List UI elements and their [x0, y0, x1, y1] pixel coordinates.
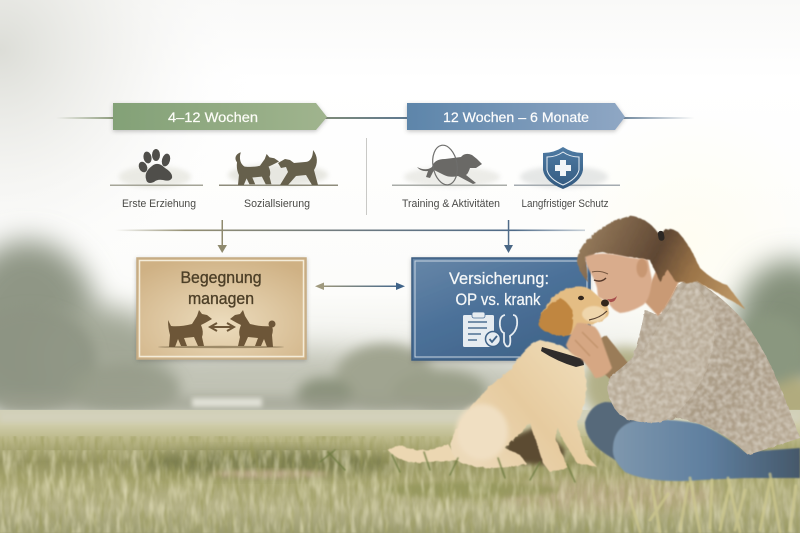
muzzle — [582, 306, 606, 322]
panel heading: Begegnung — [180, 268, 262, 287]
collar — [541, 347, 584, 367]
hair — [577, 216, 745, 309]
banner: 4–12 Wochen: 4–12 Wochen — [168, 109, 258, 125]
icon: two dogs meeting — [158, 310, 284, 348]
column: Sozialisierung — [219, 150, 338, 210]
horizontal connector — [115, 230, 585, 231]
column: Langfristiger Schutz — [514, 147, 620, 210]
double arrow between panels — [315, 282, 405, 290]
arrow: to Versicherung — [504, 220, 513, 253]
panel: Begegnung managen — [137, 258, 306, 359]
column: Erste Erziehung: Erste Erziehung — [122, 198, 196, 210]
foreground grass blades — [320, 450, 796, 532]
panel heading: managen — [188, 289, 254, 308]
sweater — [609, 279, 800, 455]
head — [542, 286, 608, 335]
column: Training & Aktivitäten: Training & Aktivitäten — [402, 198, 500, 210]
panel heading: Versicherung: — [449, 269, 549, 288]
ear, ponytail tie and facial features — [592, 230, 665, 302]
column: Erste Erziehung — [110, 149, 203, 210]
panel: Versicherung — [412, 258, 590, 360]
near sleeve — [608, 282, 716, 423]
haunch — [456, 404, 508, 460]
jeans — [585, 402, 800, 481]
shadow between puppy's legs — [505, 425, 565, 466]
puppy eye, nose and mouth — [578, 296, 609, 320]
neck — [643, 262, 682, 316]
divider — [366, 138, 367, 215]
tail of puppy — [388, 444, 458, 463]
photo: woman — [388, 216, 800, 481]
icon: dog jumping through hoop — [417, 143, 482, 187]
face — [585, 254, 652, 313]
column: Training & Aktivitäten — [392, 143, 507, 210]
ear — [538, 298, 573, 336]
banner: 12 Wochen – 6 Monate: 12 Wochen – 6 Monate — [443, 109, 589, 125]
hands — [566, 323, 612, 378]
icon: shield with cross — [543, 147, 583, 189]
column: Langfristiger Schutz: Langfristiger Schutz — [522, 198, 608, 210]
icon: paw — [137, 149, 172, 183]
far arm — [594, 335, 640, 395]
column: Sozialisierung: Soziallsierung — [244, 198, 310, 210]
panel heading: OP vs. krank — [456, 290, 541, 309]
arrow: to Begegnung managen — [218, 220, 227, 253]
banner: 12 Wochen – 6 Monate — [407, 103, 625, 130]
timeline connector lines — [56, 117, 695, 119]
icon: clipboard and stethoscope — [463, 312, 517, 347]
icon: two dogs — [235, 150, 318, 185]
banner: 4–12 Wochen — [113, 103, 327, 130]
puppy body — [451, 340, 597, 472]
